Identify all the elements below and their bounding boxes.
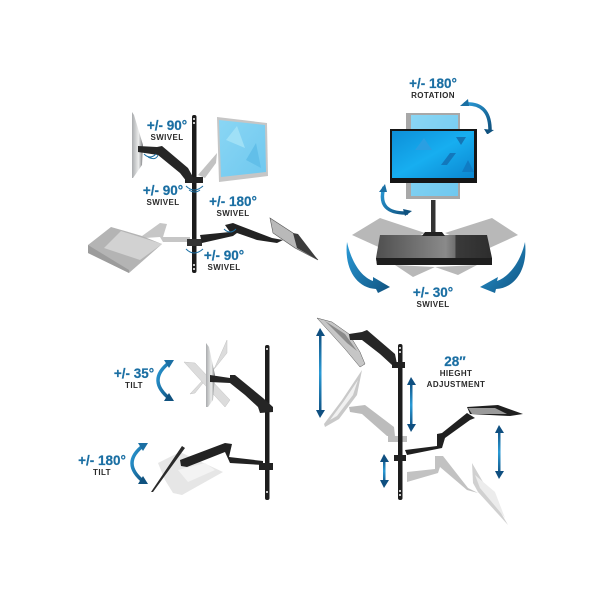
top arm: [349, 330, 397, 365]
arrow: rotation upper right: [460, 99, 494, 134]
monitor: [390, 129, 477, 183]
panel: tilt ranges: [78, 340, 273, 500]
ghost keyboard panel: [472, 463, 508, 525]
tilted keyboard line: [151, 446, 185, 492]
label: tilt 180: TILT: [93, 468, 111, 477]
upper arm: [210, 375, 273, 413]
arrow: rotation lower left: [379, 184, 412, 216]
lower arm: [200, 223, 283, 243]
stand pole: [431, 200, 436, 236]
label: swivel top left: [147, 118, 187, 142]
arrow: monitor height: [316, 328, 325, 418]
arrow: tilt 180: [132, 443, 148, 484]
ghost keyboard arm: [142, 223, 190, 242]
upper arm: [138, 146, 193, 183]
label: tilt 35: [114, 366, 154, 390]
ghost monitor arm: [198, 153, 217, 178]
ghost lower keyboard arm: [407, 456, 478, 493]
keyboard tray: [467, 405, 523, 416]
arrow: tilt 35: [158, 360, 174, 401]
pole: [265, 345, 270, 500]
lower arm: [180, 443, 263, 467]
label: rotation: [409, 76, 457, 100]
arrow: keyboard height: [495, 425, 504, 479]
swivel marks: [144, 154, 236, 253]
panel: rotation and keyboard swivel: [347, 76, 525, 309]
label: keyboard swivel: +/- 30°: [413, 285, 453, 300]
lower bracket: [187, 239, 202, 246]
label: swivel pole: [143, 183, 183, 207]
ghost keyboard trays: [352, 218, 518, 277]
label: keyboard swivel: SWIVEL: [416, 300, 450, 309]
label: swivel bottom: SWIVEL: [207, 263, 241, 272]
label: rotation: ROTATION: [411, 91, 455, 100]
arrow: keyboard swivel left: [347, 242, 390, 293]
left monitor: [132, 112, 143, 178]
label: swivel arm: SWIVEL: [216, 209, 250, 218]
pole: [398, 344, 402, 500]
lower bracket: [394, 455, 406, 461]
label: tilt 180: [78, 453, 126, 477]
ghost lower monitor arm: [349, 405, 395, 436]
panel: swivel ranges: [88, 112, 318, 273]
keyboard tray: [376, 232, 492, 265]
ghost upper bracket: [388, 436, 407, 442]
label: tilt 35: +/- 35°: [114, 366, 154, 381]
top monitor: [317, 318, 365, 367]
arrow: keyboard swivel right: [480, 242, 525, 293]
label: swivel arm: +/- 180°: [209, 194, 257, 209]
label: swivel pole: SWIVEL: [146, 198, 180, 207]
panel: height adjustment: [316, 318, 523, 525]
upper bracket: [185, 177, 203, 183]
label: swivel top left: +/- 90°: [147, 118, 187, 133]
label: swivel bottom: +/- 90°: [204, 248, 244, 263]
label: swivel bottom: [204, 248, 244, 272]
top bracket: [392, 362, 405, 368]
ghost lowered monitor: [324, 370, 362, 427]
label: swivel arm: [209, 194, 257, 218]
ghost monitor: [217, 117, 268, 182]
lower arm: [405, 413, 475, 455]
arrow: pole upper height: [407, 377, 416, 432]
label: height adjustment: [427, 354, 485, 389]
label: height adjustment: HIEGHT: [440, 369, 472, 378]
ghost keyboard tray: [158, 452, 223, 495]
label: rotation: +/- 180°: [409, 76, 457, 91]
ghost portrait monitor: [406, 113, 460, 199]
ghost tilted monitors: [184, 340, 230, 407]
lower bracket: [259, 463, 273, 470]
arrow: pole lower height: [380, 454, 389, 488]
keyboard tray side view: [270, 218, 318, 260]
label: swivel pole: +/- 90°: [143, 183, 183, 198]
label: swivel top left: SWIVEL: [150, 133, 184, 142]
ghost keyboard tray: [88, 227, 162, 273]
pole: [192, 115, 196, 273]
label: tilt 180: +/- 180°: [78, 453, 126, 468]
label: height adjustment: ADJUSTMENT: [427, 380, 485, 389]
label: height adjustment: 28″: [444, 354, 466, 369]
label: keyboard swivel: [413, 285, 453, 309]
label: tilt 35: TILT: [125, 381, 143, 390]
tilt monitor: [206, 343, 215, 407]
